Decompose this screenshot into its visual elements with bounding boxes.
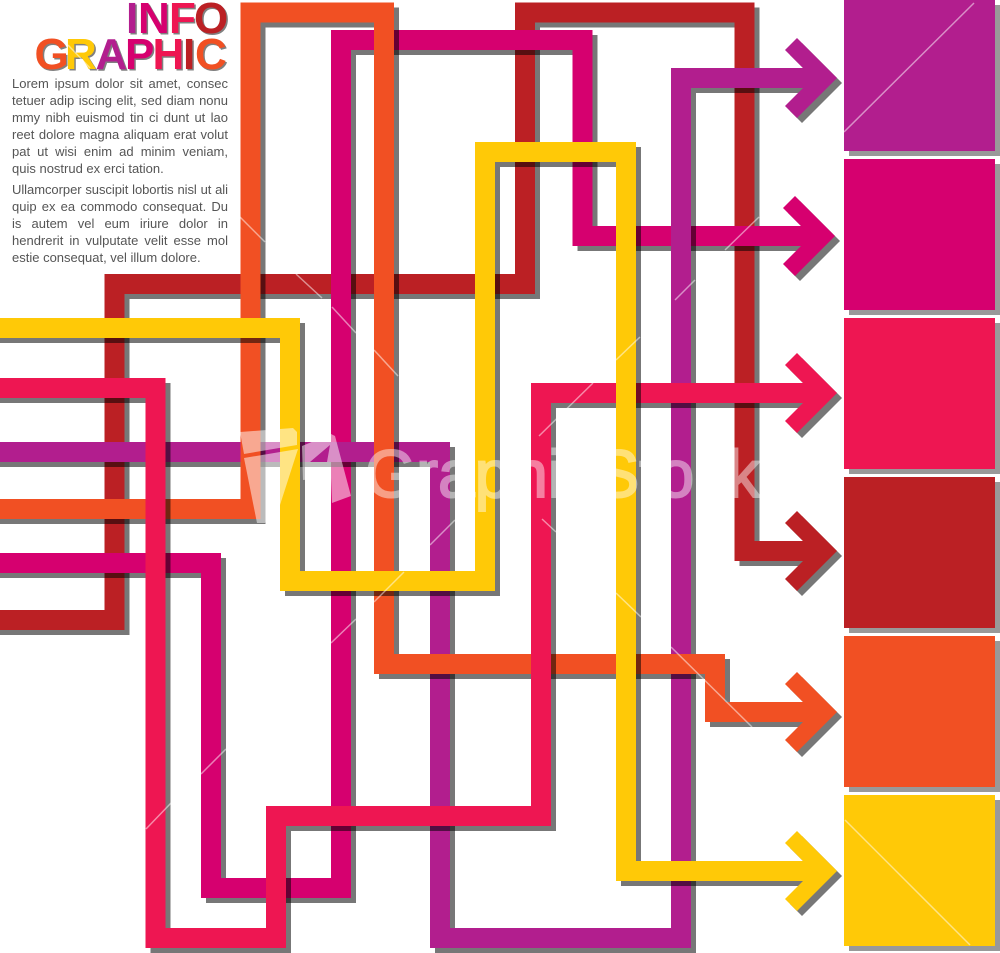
text block: body copy: is autem vel eum iriure dolor in [12, 216, 228, 231]
text block: body copy: tetuer adip iscing elit, sed diam nonu [12, 93, 228, 108]
text block: body copy: Lorem ipsum dolor sit amet, consec [12, 76, 228, 91]
text block: body copy: quis nostrud ex erci tation. [12, 161, 164, 176]
watermark text: GraphicStock [365, 437, 760, 512]
title: I [183, 30, 195, 79]
title: H [152, 30, 184, 79]
square: dark red [844, 477, 1000, 633]
title: G [34, 30, 69, 79]
square: crimson [844, 318, 1000, 474]
arrow line: magenta [0, 40, 840, 893]
text block: body copy: mmy nibh euismod tin ci dunt ut lao [12, 110, 228, 125]
square: purple [844, 0, 1000, 156]
arrow line: purple [0, 38, 842, 943]
square: yellow [844, 795, 1000, 951]
title: P [125, 30, 154, 79]
text block: body copy: estie consequat, vel illum dolore. [12, 250, 201, 265]
panel: colour squares [844, 0, 1000, 951]
arrow line: dark red [0, 12, 842, 625]
watermark logo [240, 428, 351, 523]
text block: body copy: Ullamcorper suscipit lobortis nisl ut ali [12, 182, 228, 197]
arrow line: yellow [0, 152, 842, 916]
text block: body copy: pat ut wisi enim ad minim veniam, [12, 144, 228, 159]
arrow line: orange [0, 12, 842, 757]
title: C [195, 30, 227, 79]
title: A [96, 30, 127, 79]
text block: body copy: reet dolore magna aliquam erat volut [12, 127, 228, 142]
square: orange [844, 636, 1000, 792]
square: magenta [844, 159, 1000, 315]
title [34, 0, 230, 80]
text block: body copy: hendrerit in vulputate velit esse mol [12, 233, 228, 248]
arrow line: crimson [0, 353, 842, 943]
title: GRAPHIC [36, 32, 228, 80]
text block: body copy [12, 76, 228, 265]
title: R [65, 30, 97, 79]
text block: body copy: quip ex ea commodo consequat. Du [12, 199, 228, 214]
